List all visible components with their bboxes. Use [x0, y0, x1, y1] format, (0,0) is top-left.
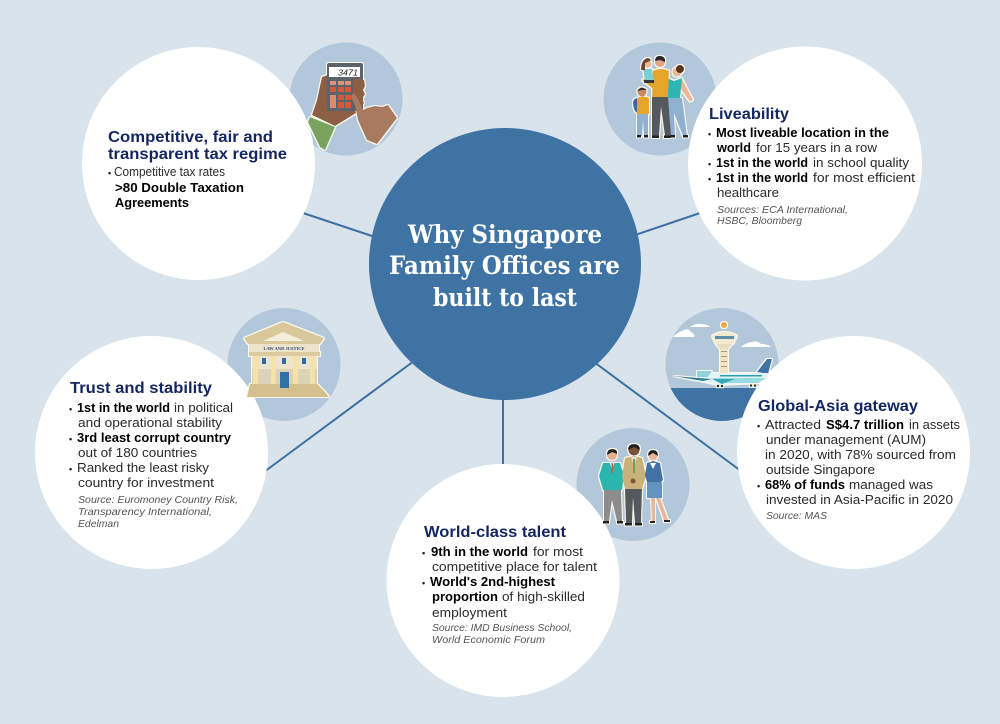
panel: central circle with title: [369, 128, 641, 400]
text: trust points: [69, 400, 233, 490]
title: Family Offices are: [389, 251, 620, 281]
text: talent points: •: [422, 548, 425, 558]
panel: world-class talent circle: [386, 464, 620, 697]
text: gateway points: •: [757, 481, 760, 491]
text: talent points: of high-skilled: [502, 589, 585, 604]
text: talent sources: World Economic Forum: [432, 634, 545, 646]
text: liveability points: •: [708, 159, 711, 169]
text: tax points: •: [108, 168, 111, 178]
text: gateway source: Source: MAS: [766, 510, 827, 522]
text: gateway points: [757, 417, 960, 507]
text: liveability points: [708, 125, 915, 200]
text: liveability points: world: [716, 140, 751, 155]
text: gateway points: invested in Asia-Pacific in 2020: [766, 492, 953, 507]
text: trust points: and operational stability: [78, 415, 223, 430]
icon: calculator in hands: 3471: [338, 68, 358, 78]
heading: tax regime: Competitive, fair and: [108, 129, 273, 146]
heading: trust: Trust and stability: [70, 380, 212, 397]
backdrop: calculator circle: [290, 42, 402, 156]
text: talent points: World's 2nd-highest: [430, 574, 556, 589]
text: liveability points: 1st in the world: [716, 170, 808, 185]
icon: calculator in hands: [308, 63, 397, 150]
icon: three professionals: [599, 444, 670, 526]
text: talent points: [422, 544, 597, 620]
title: [389, 220, 620, 313]
text: liveability sources: Sources: ECA International,: [717, 204, 848, 216]
title: built to last: [433, 283, 577, 313]
text: gateway points: 68% of funds: [765, 477, 845, 492]
icon: law and justice courthouse: [244, 322, 329, 397]
text: gateway points: Attracted: [765, 417, 821, 432]
text: tax points: [108, 165, 244, 210]
backdrop: courthouse circle: [228, 308, 340, 421]
text: talent points: competitive place for talent: [432, 559, 597, 574]
text: liveability points: Most liveable location in the: [716, 125, 889, 140]
text: liveability points: •: [708, 129, 711, 139]
text: liveability points: in school quality: [813, 155, 910, 170]
text: gateway points: in assets: [909, 417, 960, 432]
text: liveability points: healthcare: [717, 185, 779, 200]
heading: talent: World-class talent: [424, 524, 567, 541]
text: gateway points: S$4.7 trillion: [826, 417, 904, 432]
panel: liveability circle: [688, 46, 922, 280]
text: trust points: out of 180 countries: [78, 445, 198, 460]
text: trust sources: Edelman: [78, 518, 119, 530]
text: trust points: •: [69, 434, 72, 444]
text: gateway points: managed was: [849, 477, 934, 492]
title: Why Singapore: [407, 220, 602, 250]
text: tax points: Competitive tax rates: [114, 165, 225, 179]
text: talent points: •: [422, 578, 425, 588]
text: tax points: >80 Double Taxation: [115, 180, 244, 195]
text: talent points: 9th in the world: [431, 544, 528, 559]
text: trust points: •: [69, 464, 72, 474]
heading: tax regime: transparent tax regime: [108, 146, 287, 163]
panel: tax circle: [82, 47, 315, 280]
text: talent sources: [432, 622, 572, 646]
text: talent points: proportion: [432, 589, 498, 604]
text: trust sources: [78, 494, 238, 530]
text: tax points: Agreements: [115, 195, 189, 210]
backdrop: airport circle with sea and clouds: [666, 308, 778, 421]
backdrop: professionals circle: [576, 428, 690, 541]
connector lines: [264, 212, 741, 472]
text: gateway points: •: [757, 421, 760, 431]
text: trust sources: Source: Euromoney Country Risk,: [78, 494, 238, 506]
text: liveability sources: [717, 204, 848, 227]
heading: tax regime: [108, 129, 287, 163]
text: talent sources: Source: IMD Business School,: [432, 622, 572, 634]
text: trust points: in political: [174, 400, 233, 415]
text: liveability points: for most efficient: [813, 170, 915, 185]
text: trust points: 1st in the world: [77, 400, 170, 415]
backdrop: family circle: [604, 42, 716, 156]
text: trust points: 3rd least corrupt country: [77, 430, 232, 445]
text: liveability points: •: [708, 174, 711, 184]
text: gateway points: under management (AUM): [766, 432, 926, 447]
text: liveability points: 1st in the world: [716, 155, 808, 170]
icon: airport tower and plane: [673, 322, 772, 387]
text: gateway points: in 2020, with 78% sourced from: [765, 447, 956, 462]
text: trust sources: Transparency International,: [78, 506, 212, 518]
text: talent points: for most: [533, 544, 583, 559]
panel: trust circle: [35, 336, 268, 569]
text: talent points: employment: [432, 605, 507, 620]
icon: law and justice courthouse: LAW AND JUSTICE: [264, 346, 304, 351]
text: trust points: •: [69, 404, 72, 414]
heading: gateway: Global-Asia gateway: [758, 398, 918, 415]
text: liveability points: for 15 years in a row: [756, 140, 878, 155]
text: liveability sources: HSBC, Bloomberg: [717, 215, 802, 227]
panel: global-asia gateway circle: [737, 336, 970, 569]
icon: family: [633, 56, 693, 138]
heading: liveability: Liveability: [709, 106, 789, 123]
text: trust points: Ranked the least risky: [77, 460, 210, 475]
text: gateway points: outside Singapore: [766, 462, 875, 477]
text: trust points: country for investment: [78, 475, 214, 490]
